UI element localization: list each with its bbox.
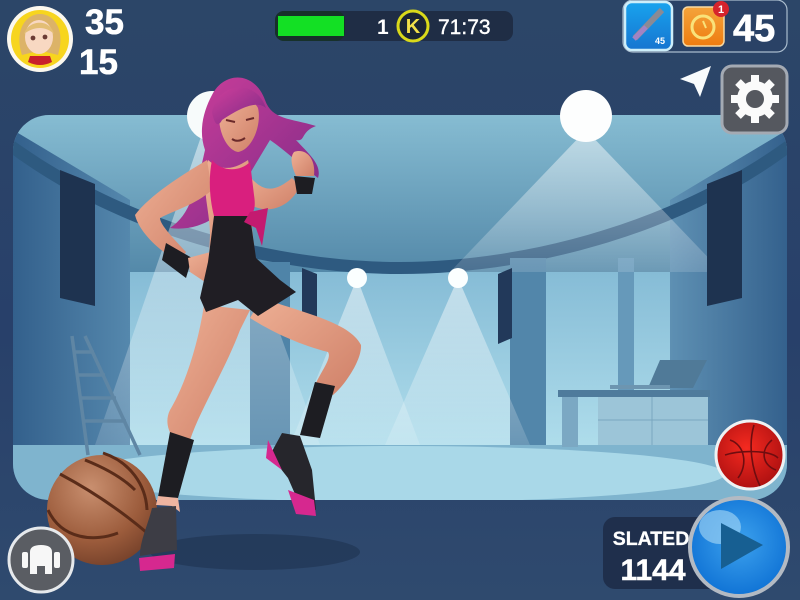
top tie: [244, 208, 268, 246]
light beams: [95, 125, 722, 445]
stats: 35 / 15: [79, 3, 124, 82]
front leg: [156, 305, 250, 512]
left wall: [13, 133, 130, 445]
ladder: [72, 336, 140, 455]
slated panel: SLATED: [613, 528, 689, 550]
pink top: [210, 160, 255, 216]
ceiling lamps: [187, 90, 612, 142]
android button: [9, 528, 73, 592]
orange timer card: 1: [718, 4, 724, 16]
floor: [13, 445, 787, 500]
status bar: 1: [377, 16, 389, 39]
floor shadow: [150, 534, 360, 570]
shoe, standing: [139, 506, 177, 571]
top-right item bar: [623, 0, 787, 52]
room scene: [13, 115, 787, 502]
small lamps: [347, 268, 468, 288]
status bar: [275, 11, 513, 41]
hair, back: [170, 78, 319, 229]
play button: [690, 498, 788, 596]
back wall: [130, 272, 670, 445]
arm, left: [135, 160, 238, 284]
slated panel: 1144: [620, 554, 686, 587]
stats: 35 / 15: 15: [79, 43, 118, 82]
curved ceiling edge: [13, 140, 787, 274]
wall speakers: [60, 170, 742, 344]
orange timer card: [683, 1, 729, 46]
desk with laptop: [558, 360, 710, 447]
back leg: [250, 298, 361, 438]
head: [219, 99, 259, 152]
blue item card: [625, 2, 672, 50]
shoe, raised: [266, 433, 316, 516]
stats: 35 / 15: 35: [85, 3, 124, 42]
navigation arrow: [680, 66, 711, 97]
right wall: [670, 133, 787, 445]
blue item card: 45: [655, 36, 665, 46]
status bar: 71:73: [438, 16, 491, 39]
red ball button: [716, 421, 784, 489]
arm, right: [243, 151, 315, 209]
fringe: [212, 87, 266, 124]
slated panel: [603, 517, 723, 589]
torso: [205, 160, 258, 282]
top-right item bar: 45: [733, 8, 775, 50]
black outfit: [200, 216, 296, 316]
status bar: K: [406, 16, 421, 38]
avatar icon: [7, 6, 73, 72]
basketball, brown: [47, 453, 157, 565]
pillars: [250, 258, 634, 448]
character: [135, 78, 361, 571]
settings button: [722, 66, 787, 133]
